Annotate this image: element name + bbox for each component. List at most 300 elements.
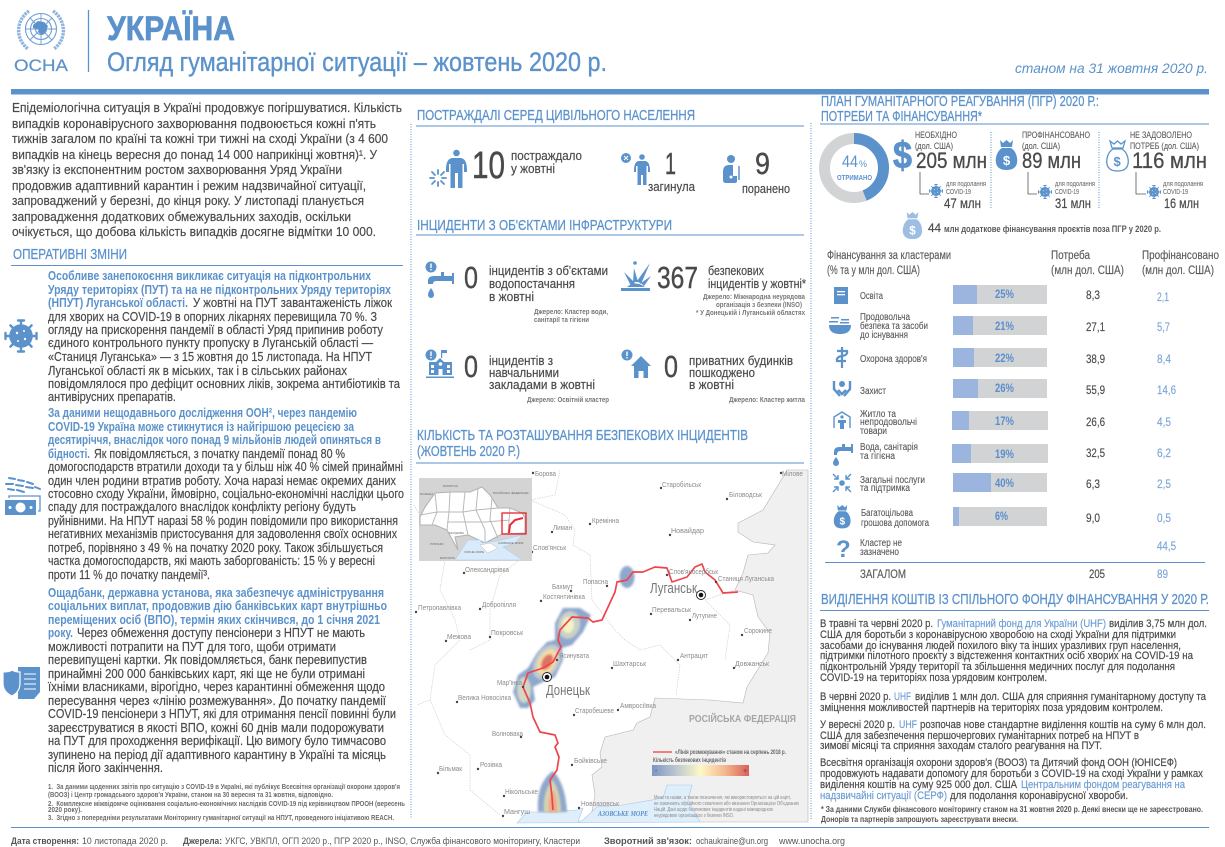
header xyxy=(14,10,1208,77)
row: coordination and common services xyxy=(833,473,1171,494)
icon: explosion xyxy=(621,261,651,291)
stat: required xyxy=(915,130,987,211)
map: city labels: Антрацит xyxy=(680,651,708,660)
text block: Luhansk: «Станиця Луганська» — з 15 жовтня до 15 листопада. На НПУТ xyxy=(48,350,372,364)
map: city labels: Петропавлівка xyxy=(418,603,462,612)
row: food security: до існування xyxy=(860,330,908,341)
row: total: 89 xyxy=(1157,567,1168,581)
text block: recession: негативних механізмів пристосування для задоволення своїх основних xyxy=(48,527,398,541)
text block: Oschadbank: переміщених осіб (ВПО), термін яких скінчився, до 1 січня 2021 xyxy=(48,613,380,627)
row: protection: 26% xyxy=(995,383,1014,395)
icon: injured person xyxy=(723,155,739,183)
text block: Oschadbank: року. xyxy=(48,626,73,640)
stat: security incidents xyxy=(657,260,806,317)
row: shelter: Житло та xyxy=(860,409,896,420)
text block: Luhansk: Луганської області як в міських, так і в сільських районах xyxy=(48,364,348,378)
text block: recession: руйнівними. На НПУТ наразі 58 % родин повідомили про використання xyxy=(48,514,398,528)
map: city labels: Мангуш xyxy=(504,807,530,816)
map marker: Donetsk xyxy=(542,672,552,682)
panel: map section xyxy=(414,428,808,823)
date: станом на 31 жовтня 2020 р. xyxy=(1015,60,1208,76)
inset map of Ukraine: РОСІЙСЬКА ФЕДЕРАЦІЯ xyxy=(493,491,528,495)
map: city labels: Старобільськ xyxy=(662,480,702,489)
row: protection: 14,6 xyxy=(1157,383,1176,397)
text block: Oschadbank: COVID-19 пенсіонери з НПУТ, які для отримання пенсії повинні були xyxy=(48,707,396,721)
inset map of Ukraine xyxy=(419,478,532,561)
text block: recession: COVID-19 Україна може стикнутися із найгіршою рецесією за xyxy=(48,420,355,434)
row: education: 8,3 xyxy=(1086,288,1100,302)
stat: unmet: COVID-19 xyxy=(1163,189,1188,196)
row: education xyxy=(834,285,1169,304)
map legend: - xyxy=(655,768,658,775)
row: education: 2,1 xyxy=(1157,290,1169,304)
table header: (% та у млн дол. США) xyxy=(827,265,920,277)
row: health: 8,4 xyxy=(1157,352,1171,366)
map legend xyxy=(652,750,786,776)
text block: Oschadbank: пересування через «лінію розмежування». До початку пандемії xyxy=(48,694,386,708)
stat: funded xyxy=(1022,130,1095,211)
row: multi-purpose cash: Багатоцільова xyxy=(861,508,913,519)
row: cluster not specified: зазначено xyxy=(860,547,899,558)
map: city labels: Амвросіївка xyxy=(620,701,657,710)
intro text: зв'язку із експонентним ростом захворювання Уряд України xyxy=(12,162,342,177)
map: city labels: Луганськ xyxy=(650,580,697,597)
footer: Дата створення: xyxy=(11,836,79,847)
text block: Oschadbank: зареєструватися в якості ВПО, кожні 60 днів мали подорожувати xyxy=(48,721,384,735)
stat: 10 affected: постраждало xyxy=(511,149,582,163)
map disclaimer: Націй. Дані щодо безпекових інцидентів надані міжнародною xyxy=(654,806,773,813)
text block: recession xyxy=(48,406,404,582)
row: multi-purpose cash xyxy=(834,505,1171,529)
heading: response plan: ПЛАН ГУМАНІТАРНОГО РЕАГУВАННЯ (ПГР) 2020 Р.: xyxy=(821,94,1099,110)
row: multi-purpose cash: 9,0 xyxy=(1086,511,1100,525)
map: city labels: Старобешеве xyxy=(575,706,614,715)
map disclaimer: Межі та назви, а також позначення, які використовуються на цій карті, xyxy=(654,794,791,801)
note: donors: Донорів та партнерів запрошують зареєструвати внески. xyxy=(821,814,1018,824)
map: city labels: Мар'їнка xyxy=(497,678,523,687)
text block: recession: потреб, порівняно з 49 % на початку 2020 року. Також збільшується xyxy=(48,541,383,555)
row: health: 38,9 xyxy=(1086,352,1105,366)
text block: WHO and UNICEF: виділення коштів на суму 925 000 дол. США xyxy=(820,779,1017,791)
map: Russian Federation area xyxy=(590,470,808,822)
text block: Luhansk: антивірусних препаратів. xyxy=(48,390,176,404)
row: water and sanitation: 32,5 xyxy=(1086,446,1105,460)
row: protection xyxy=(834,379,1176,398)
row: multi-purpose cash: 0,5 xyxy=(1157,511,1171,525)
stat: unmet: 16 млн xyxy=(1164,196,1199,211)
inset map of Ukraine: БОЛГАРІЯ xyxy=(440,556,455,560)
stat: education incidents: 0 xyxy=(464,349,478,384)
text block: Oschadbank: перевипущені картки. Як повідомляється, банк перевипустив xyxy=(48,653,367,667)
intro text: тижнів загалом по країні та кожні три тижні на сході України (з 4 600 xyxy=(12,131,388,146)
heading: map: (ЖОВТЕНЬ 2020 Р.) xyxy=(417,444,520,460)
intro text: запроваджений у березні, до кінця року. У листопаді планується xyxy=(12,193,364,208)
stat: houses damaged: приватних будинків xyxy=(689,354,793,368)
text block: Oschadbank xyxy=(47,586,396,775)
text block: UHF September: США для забезпечення першочергових гуманітарних потреб на НПУТ в xyxy=(820,730,1139,742)
text block: recession: частка домогосподарств, які мають заборгованість: 15 % у вересні xyxy=(48,554,375,568)
panel: pooled fund allocations xyxy=(820,592,1209,824)
text block: Luhansk: (НПУТ) Луганської області. xyxy=(48,296,188,310)
icon: light money bag: $ xyxy=(909,225,916,237)
stat: 9 injured: 9 xyxy=(755,146,770,181)
text block: UHF June: UHF xyxy=(894,691,911,703)
stat: water incidents: Джерело: Кластер води, xyxy=(534,309,608,316)
row: shelter: 4,5 xyxy=(1157,415,1171,429)
map: city labels: Бойківське xyxy=(574,756,607,765)
text block: UHF May-June xyxy=(820,618,1207,684)
row: multi-purpose cash: грошова допомога xyxy=(861,518,929,529)
map: city labels: Покровськ xyxy=(491,628,524,637)
text block: recession: домогосподарств втратили доходи та у більш ніж 40 % сімей принаймні xyxy=(48,460,403,474)
footnotes: 3. Згідно з попередніми результатами Моніторингу гуманітарної ситуації на НПУТ, проведеного ініціативою REACH. xyxy=(48,814,394,822)
row: shelter: 26,6 xyxy=(1086,415,1105,429)
stat: unmet: НЕ ЗАДОВОЛЕНО xyxy=(1130,130,1192,141)
text block: recession: один член родини втратив роботу. Хоча наразі немає окремих даних xyxy=(48,474,397,488)
text block: Luhansk: Особливе занепокоєння викликає ситуація на підконтрольних xyxy=(48,269,371,283)
text block: Oschadbank: соціальних виплат, продовжив дію банківських карт внутрішньо xyxy=(48,599,387,613)
row: food security: безпека та засоби xyxy=(860,320,928,332)
stat: water incidents: 0 xyxy=(464,260,478,295)
stat: security incidents: організація з безпеки (INSO) xyxy=(716,301,802,309)
inset map of Ukraine: МОЛДОВА xyxy=(449,531,464,535)
stat: 1 killed xyxy=(648,146,695,194)
stat: 1 killed: загинула xyxy=(648,180,695,194)
map: Azov sea xyxy=(517,785,700,823)
map disclaimer: неурядовою організацією з безпеки INSO. xyxy=(654,813,734,819)
text block: Oschadbank: зупинено на період дії адаптивного карантину в Україні та місяць xyxy=(48,748,386,762)
text block: Oschadbank: Через обмеження доступу пенсіонери з НПУТ не мають xyxy=(77,626,365,640)
row: shelter: 17% xyxy=(995,416,1014,428)
icon: shield and document xyxy=(3,667,40,699)
row: multi-purpose cash: 6% xyxy=(995,511,1008,523)
panel: left column xyxy=(3,100,406,822)
stat: required: для подолання xyxy=(946,181,986,188)
text block: Luhansk: огляду на прискорення пандемії в області Уряд припинив роботу xyxy=(48,323,384,337)
stat: education incidents: закладами в жовтні xyxy=(489,378,595,392)
map: contact line xyxy=(523,564,738,810)
text block: Oschadbank: принаймні 200 000 банківських карт, які ще не були отримані xyxy=(48,667,365,681)
map: city labels: Сорокине xyxy=(744,626,772,635)
text block: UHF May-June: COVID-19 на територіях поза урядовим контролем. xyxy=(820,672,1047,684)
map disclaimer xyxy=(654,794,799,819)
text block: UHF May-June: засобами до існування людей похилого віку та інших уразливих груп населення, xyxy=(820,640,1181,652)
text block: WHO and UNICEF: Центральним фондом реагування на xyxy=(1021,779,1186,791)
text block: Oschadbank: їхніми власниками, вірогідно, через карантинні обмеження щодо xyxy=(47,680,385,694)
stat: education incidents xyxy=(464,349,609,404)
row: food security: 21% xyxy=(995,321,1014,333)
footer xyxy=(11,836,845,847)
row: total: ЗАГАЛОМ xyxy=(860,569,906,581)
stat: funded: ПРОФІНАНСОВАНО xyxy=(1022,130,1090,141)
stat: unmet xyxy=(1130,130,1207,211)
intro text: випадків коронавірусного захворювання подвоюється кожні п'ять xyxy=(12,116,376,131)
stat: security incidents: 367 xyxy=(657,260,698,295)
stat: additional funding: 44 xyxy=(928,221,941,235)
map: city labels: Більмак xyxy=(439,764,463,773)
stat: required: COVID-19 xyxy=(946,189,971,196)
stat: 9 injured xyxy=(742,146,790,196)
row: cluster not specified: ? xyxy=(836,536,851,563)
map: city labels: Донецьк xyxy=(546,682,590,699)
map legend: Кількість безпекових інцидентів xyxy=(653,757,726,764)
icon: house alert xyxy=(622,350,651,378)
panel: response plan xyxy=(820,94,1209,239)
row: protection: Захист xyxy=(860,386,886,397)
stat: unmet: 116 млн xyxy=(1132,148,1207,173)
map: city labels: РОСІЙСЬКА ФЕДЕРАЦІЯ xyxy=(689,712,796,725)
stat: houses damaged: Джерело: Кластер житла xyxy=(729,397,805,404)
stat: water incidents: водопостачання xyxy=(489,277,575,291)
map: city labels: Довжанськ xyxy=(735,659,770,668)
row: protection: 55,9 xyxy=(1086,383,1105,397)
stat: 9 injured: поранено xyxy=(742,182,790,196)
stat: unmet: ПОТРЕБ (дол. США) xyxy=(1130,141,1199,152)
icon: person with burst xyxy=(430,150,467,188)
panel: civilian casualties xyxy=(416,108,804,196)
text block: recession: спаду для постраждалого внаслідок конфлікту регіону будуть xyxy=(48,500,356,514)
text block: Luhansk: для хворих на COVID-19 в опорних лікарнях перевищила 70 %. З xyxy=(48,310,377,324)
inset map of Ukraine: ЧОРНЕ МОРЕ xyxy=(464,550,484,554)
text block: UHF May-June: Гуманітарний фонд для України (UHF) xyxy=(937,618,1106,630)
map: city labels: Олександрівка xyxy=(465,565,510,574)
table header xyxy=(827,250,1219,277)
row: water and sanitation: 6,2 xyxy=(1157,446,1171,460)
heading: infrastructure: ІНЦИДЕНТИ З ОБ'ЄКТАМИ ІНФРАСТРУКТУРИ xyxy=(417,218,672,234)
stat: 1 killed: 1 xyxy=(665,146,676,181)
text block: UHF May-June: В травні та червні 2020 р. xyxy=(820,618,933,630)
text block: recession: За даними нещодавнього дослідження ООН², через пандемію xyxy=(48,406,357,420)
map: city labels: Добропілля xyxy=(482,600,516,609)
icon: virus xyxy=(6,320,36,352)
text block: Luhansk xyxy=(48,269,400,404)
stat: 10 affected xyxy=(472,145,582,187)
row: shelter: товари xyxy=(860,426,887,437)
text block: UHF September: У вересні 2020 р. xyxy=(820,719,895,731)
table header: (млн дол. США) xyxy=(1051,265,1124,277)
text block: UHF June: В червні 2020 р. xyxy=(820,691,891,703)
footer: Зворотний зв'язок: xyxy=(604,836,692,847)
map: city labels: Новоазовськ xyxy=(581,799,620,808)
stat: funded: (дол. США) xyxy=(1022,141,1060,152)
table header: (млн дол. США) xyxy=(1142,265,1214,277)
row: multi-purpose cash: $ xyxy=(839,517,845,528)
row: cluster not specified: Кластер не xyxy=(860,538,902,549)
stat: houses damaged: в жовтні xyxy=(689,378,734,392)
table header: Потреба xyxy=(1051,250,1091,262)
map: city labels: Розівка xyxy=(480,760,503,769)
icon: school alert xyxy=(426,350,454,378)
icon: outlined money bag xyxy=(1107,141,1128,171)
stat: education incidents: Джерело: Освітній кластер xyxy=(527,396,609,404)
icon: outlined money bag: $ xyxy=(1114,154,1122,169)
panel: funding by cluster table xyxy=(825,250,1219,581)
row: water and sanitation xyxy=(833,442,1171,466)
stat: houses damaged: пошкоджено xyxy=(689,366,755,380)
panel: infrastructure incidents xyxy=(416,218,806,404)
text block: Oschadbank: Ощадбанк, державна установа, яка забезпечує адміністрування xyxy=(48,586,384,600)
icon: water tap alert xyxy=(426,262,454,298)
inset map of Ukraine: АЗОВСЬКЕ МОРЕ xyxy=(498,541,524,545)
stat: water incidents xyxy=(464,260,608,324)
text block: Luhansk: У жовтні на ПУТ завантаженість ліжок xyxy=(193,296,392,310)
text block: Oschadbank: на ПУТ для проходження верифікації. Цю вимогу було тимчасово xyxy=(48,734,386,748)
stat: funded: 31 млн xyxy=(1055,196,1091,211)
icon: wheat and cash xyxy=(5,478,40,515)
map: city labels: Бахмут xyxy=(552,582,573,591)
text block: UHF June xyxy=(820,691,1207,714)
row: water and sanitation: Вода, санітарія xyxy=(860,442,918,453)
intro text: Епідеміологічна ситуація в Україні продовжує погіршуватися. Кількість xyxy=(12,100,402,115)
map: city labels: АЗОВСЬКЕ МОРЕ xyxy=(597,810,648,818)
row: water and sanitation: та гігієна xyxy=(860,451,895,462)
map: city labels: Станиця Луганська xyxy=(718,574,775,583)
row: health: Охорона здоров'я xyxy=(860,354,927,365)
row: food security: 5,7 xyxy=(1157,320,1170,334)
text block: Oschadbank: можливості потрапити на ПУТ для того, щоби отримати xyxy=(48,640,336,654)
heading: map xyxy=(417,428,748,460)
footer: 10 листопада 2020 р. xyxy=(82,836,168,847)
map: city labels: Біловодськ xyxy=(729,490,763,499)
footnotes: 2. Комплексне міжвідомче оцінювання соціально-економічних наслідків COVID-19 під керівництвом ПРООН (вересень xyxy=(48,800,406,808)
row: total xyxy=(860,567,1168,581)
table header: Фінансування за кластерами xyxy=(827,250,951,262)
row: cluster not specified: 44,5 xyxy=(1157,539,1176,553)
footer: УКГС, УВКПЛ, ОГП 2020 р., ПГР 2020 р., INSO, Служба фінансового моніторингу, Кластери xyxy=(225,836,580,847)
text block: UHF September: зимові місяці та сприяння заходам сталого реагування на ПУТ. xyxy=(820,740,1102,752)
row: shelter: непродовольчі xyxy=(860,417,917,428)
text block: Oschadbank: після його закінчення. xyxy=(48,761,163,775)
map: city labels: Межова xyxy=(447,632,472,641)
stat: additional funding xyxy=(928,221,1161,235)
stat: funded: COVID-19 xyxy=(1055,189,1079,196)
stat: security incidents: * У Донецькій і Луганській областях xyxy=(696,309,805,317)
row: education: Освіта xyxy=(860,291,883,302)
heading: response plan xyxy=(821,94,1099,125)
stat: houses damaged: 0 xyxy=(664,349,678,384)
inset map of Ukraine: ПОЛЬЩА xyxy=(420,492,433,496)
text block: Luhansk: єдиного контрольного пункту пропуску в Луганській області — xyxy=(48,336,373,350)
map: city labels: Борова xyxy=(535,469,557,478)
stat: security incidents: Джерело: Міжнародна неурядова xyxy=(703,293,805,301)
row: health: 22% xyxy=(995,353,1014,365)
row: cluster not specified xyxy=(836,536,1176,563)
heading: casualties: ПОСТРАЖДАЛІ СЕРЕД ЦИВІЛЬНОГО НАСЕЛЕННЯ xyxy=(417,108,695,124)
stat: security incidents: інцидентів у жовтні* xyxy=(708,277,806,291)
map: admin boundaries xyxy=(414,470,735,815)
stat: unmet: для подолання xyxy=(1163,181,1203,188)
map: city labels: Кремінна xyxy=(592,516,620,525)
icon: person killed xyxy=(621,153,650,185)
footer: Джерела: xyxy=(183,836,222,847)
stat: required: 205 млн xyxy=(916,148,987,173)
logo: OCHA emblem: OCHA xyxy=(14,57,68,75)
text block: UHF September: UHF xyxy=(899,719,917,731)
map legend: + xyxy=(743,768,747,775)
intro text: запровадження додаткових обмежувальних заходів, оскільки xyxy=(12,209,351,224)
stat: additional funding: млн додаткове фінансування проєктів поза ПГР у 2020 р. xyxy=(944,224,1161,235)
text block: recession: десятиріччя, внаслідок чого понад 9 мільйонів людей опиняться в xyxy=(48,433,381,447)
icon: money bag xyxy=(996,140,1017,170)
footer: www.unocha.org xyxy=(778,836,845,847)
intro text: продовжив адаптивний карантин і режим надзвичайної ситуації, xyxy=(12,178,366,193)
subtitle: Огляд гуманітарної ситуації – жовтень 2020 р. xyxy=(107,47,607,77)
donut chart: 44% received: % xyxy=(859,159,867,169)
map: city labels: Попасна xyxy=(583,577,609,586)
footnotes: 1. За даними щоденних звітів про ситуацію з COVID-19 в Україні, які публікує Всесвітня організації охорони здоров'я xyxy=(48,783,400,791)
footer: ochaukraine@un.org xyxy=(696,836,768,847)
row: education: 25% xyxy=(995,289,1014,301)
map: city labels: Мілове xyxy=(782,469,803,478)
row: water and sanitation: 19% xyxy=(995,449,1014,461)
donut chart: 44% received: ОТРИМАНО xyxy=(837,175,872,182)
stat: water incidents: в жовтні xyxy=(489,290,534,304)
donut chart: 44% received xyxy=(824,138,884,198)
row: coordination and common services: 6,3 xyxy=(1086,477,1100,491)
row: food security xyxy=(829,312,1170,341)
row: shelter xyxy=(834,409,1171,437)
stat: houses damaged xyxy=(664,349,805,404)
text block: UHF June: зміцнення можливостей партнерів на територіях поза урядовим контролем. xyxy=(820,702,1163,714)
heading: response plan: ПОТРЕБИ ТА ФІНАНСУВАННЯ* xyxy=(821,109,982,125)
text block: recession: бідності. xyxy=(48,447,90,461)
intro text: очікується, що добова кількість випадків досягне відмітки 10 000. xyxy=(12,224,376,239)
map: city labels xyxy=(415,469,803,818)
footnotes xyxy=(48,783,406,822)
map disclaimer: не означають офіційного схвалення або визнання Організацією Об'єднаних xyxy=(654,800,799,807)
stat: security incidents: безпекових xyxy=(708,264,765,278)
row: coordination and common services: та підтримка xyxy=(860,483,910,494)
footnotes: (ВООЗ) і Центр громадського здоров'я України, станом на 30 вересня та 31 жовтня, відповідно. xyxy=(48,791,333,799)
text block: recession: Як повідомляється, з початку пандемії понад 80 % xyxy=(94,447,345,461)
stat: required: (дол. США) xyxy=(915,141,953,152)
row: health xyxy=(837,347,1171,368)
stat: education incidents: інцидентів з xyxy=(489,354,553,368)
stat: education incidents: навчальними xyxy=(489,366,559,380)
inset map of Ukraine: РУМУНІЯ xyxy=(430,542,443,546)
row: total: 205 xyxy=(1089,567,1105,581)
map: city labels: Волноваха xyxy=(492,729,524,738)
inset map of Ukraine: БІЛОРУСЬ xyxy=(443,484,458,488)
map: city labels: Велика Новосілка xyxy=(458,693,512,702)
heading: operational changes: ОПЕРАТИВНІ ЗМІНИ xyxy=(13,247,127,263)
text block: WHO and UNICEF: для подолання коронавірусної хвороби. xyxy=(950,790,1128,802)
title: УКРАЇНА xyxy=(107,10,235,48)
text block: recession: стосовно сходу України, ймовірно, соціально-економічні наслідки цього xyxy=(48,487,404,501)
stat: water incidents: інцидентів з об'єктами xyxy=(489,264,608,278)
intro text xyxy=(12,100,402,239)
row: coordination and common services: 2,5 xyxy=(1157,477,1171,491)
text block: UHF May-June: підконтрольній Уряду території та збільшення медичних послуг для подолання xyxy=(820,661,1175,673)
icon: light money bag xyxy=(903,212,922,239)
map: city labels: Лутугине xyxy=(692,611,717,620)
map: city labels: Лиман xyxy=(553,523,572,532)
text block: Luhansk: Уряду територіях (ПУТ) та на не підконтрольних Уряду територіях xyxy=(48,283,391,297)
stat: 10 affected: у жовтні xyxy=(511,162,555,176)
map: city labels: Шахтарськ xyxy=(613,659,647,668)
map: city labels: Нікольське xyxy=(505,787,538,796)
map: incident heat areas xyxy=(513,566,634,812)
map: city labels: Слов'яносербськ xyxy=(669,567,719,576)
stat: 10 affected: 10 xyxy=(472,145,505,187)
text block: UHF September xyxy=(820,719,1206,752)
row: food security: 27,1 xyxy=(1086,320,1105,334)
map: city labels: Ясинувата xyxy=(559,651,590,660)
icon: money bag: $ xyxy=(1003,153,1011,168)
map legend: «Лінія розмежування» станом на серпень 2018 р. xyxy=(675,750,786,756)
row: food security: Продовольча xyxy=(860,312,910,323)
text block: WHO and UNICEF: надзвичайні ситуації (СЕРФ) xyxy=(820,790,947,802)
